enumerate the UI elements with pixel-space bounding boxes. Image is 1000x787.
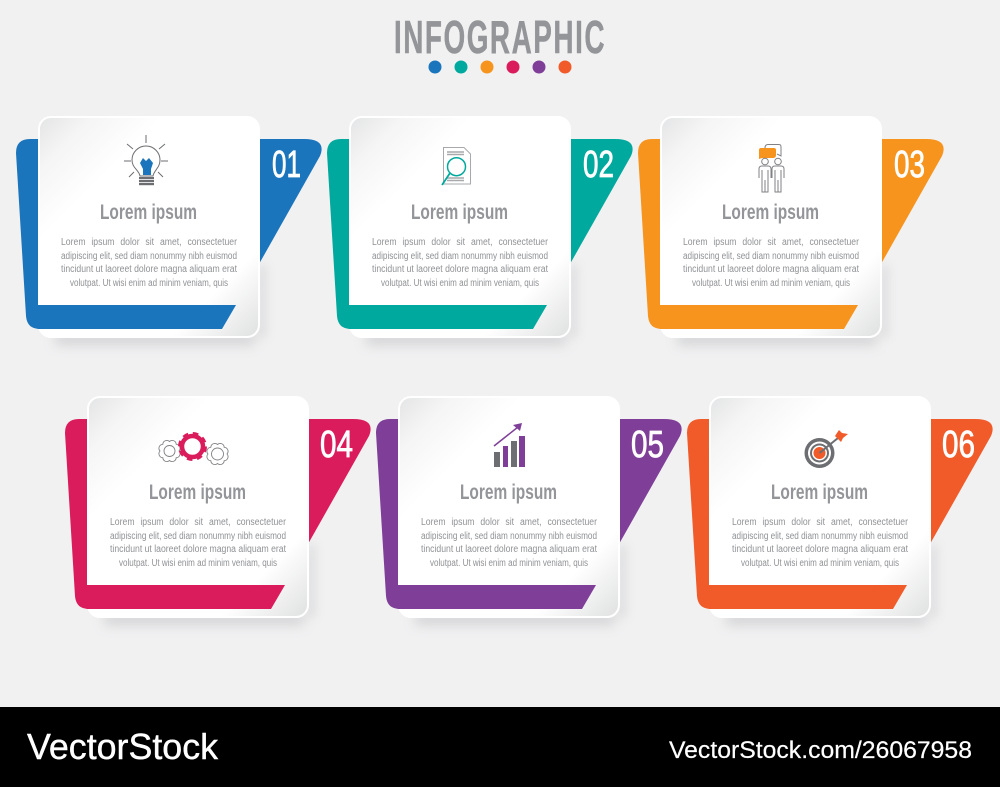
heading: Lorem ipsum — [149, 481, 246, 504]
text block: volutpat. Ut wisi enim ad minim veniam, quis — [430, 558, 588, 569]
title: INFOGRAPHIC — [394, 11, 606, 63]
panel: step 05 — [376, 397, 682, 625]
colour ribbon — [65, 419, 371, 609]
white card — [661, 117, 881, 337]
text block: Lorem ipsum dolor sit amet, consectetuer — [61, 237, 238, 248]
colour dots — [428, 60, 572, 74]
heading: Lorem ipsum — [100, 201, 197, 224]
text block: tincidunt ut laoreet dolore magna aliquam erat — [110, 544, 286, 555]
text block — [61, 237, 238, 289]
text block: adipiscing elit, sed diam nonummy nibh euismod — [683, 251, 859, 262]
white card — [710, 397, 930, 617]
text block: Lorem ipsum dolor sit amet, consectetuer — [110, 517, 287, 528]
white card — [399, 397, 619, 617]
colour ribbon — [687, 419, 993, 609]
icon: target with arrow — [804, 430, 848, 468]
icon: light bulb — [124, 135, 168, 185]
colour band — [349, 305, 547, 329]
number: 03 — [894, 144, 925, 186]
text block: adipiscing elit, sed diam nonummy nibh euismod — [61, 251, 237, 262]
footer bar — [0, 707, 1000, 787]
white card — [39, 117, 259, 337]
heading: Lorem ipsum — [460, 481, 557, 504]
number: 06 — [942, 424, 975, 466]
white card — [350, 117, 570, 337]
text block — [421, 517, 598, 569]
colour band — [38, 305, 236, 329]
text block: Lorem ipsum dolor sit amet, consectetuer — [683, 237, 860, 248]
colour ribbon — [376, 419, 682, 609]
text block — [110, 517, 287, 569]
text block: Lorem ipsum dolor sit amet, consectetuer — [372, 237, 549, 248]
icon: two people talking — [759, 144, 784, 192]
colour ribbon — [16, 139, 322, 329]
number: 01 — [272, 144, 301, 186]
colour ribbon — [327, 139, 633, 329]
text block: volutpat. Ut wisi enim ad minim veniam, quis — [381, 278, 539, 289]
white card — [88, 397, 308, 617]
panel: step 02 — [327, 117, 633, 345]
panel: step 01 — [16, 117, 322, 345]
heading: Lorem ipsum — [411, 201, 508, 224]
text block: tincidunt ut laoreet dolore magna aliquam erat — [61, 264, 237, 275]
text block — [732, 517, 909, 569]
number: 04 — [320, 424, 353, 466]
footer logo: VectorStock — [27, 726, 219, 767]
text block: tincidunt ut laoreet dolore magna aliquam erat — [683, 264, 859, 275]
colour band — [660, 305, 858, 329]
text block: Lorem ipsum dolor sit amet, consectetuer — [421, 517, 598, 528]
text block: adipiscing elit, sed diam nonummy nibh euismod — [372, 251, 548, 262]
icon: rising bar chart — [494, 423, 525, 467]
heading: Lorem ipsum — [722, 201, 819, 224]
text block: volutpat. Ut wisi enim ad minim veniam, quis — [70, 278, 228, 289]
text block: volutpat. Ut wisi enim ad minim veniam, quis — [741, 558, 899, 569]
text block: adipiscing elit, sed diam nonummy nibh euismod — [421, 531, 597, 542]
heading: Lorem ipsum — [771, 481, 868, 504]
icon: gears — [159, 434, 228, 465]
colour ribbon — [638, 139, 944, 329]
text block — [372, 237, 549, 289]
icon: document search — [442, 148, 470, 185]
panel: step 06 — [687, 397, 993, 625]
text block: adipiscing elit, sed diam nonummy nibh euismod — [110, 531, 286, 542]
text block: tincidunt ut laoreet dolore magna aliquam erat — [421, 544, 597, 555]
text block: tincidunt ut laoreet dolore magna aliquam erat — [732, 544, 908, 555]
colour band — [398, 585, 596, 609]
colour band — [709, 585, 907, 609]
number: 05 — [631, 424, 664, 466]
text block: adipiscing elit, sed diam nonummy nibh euismod — [732, 531, 908, 542]
panel: step 03 — [638, 117, 944, 345]
panel: step 04 — [65, 397, 371, 625]
text block: Lorem ipsum dolor sit amet, consectetuer — [732, 517, 909, 528]
text block: volutpat. Ut wisi enim ad minim veniam, quis — [119, 558, 277, 569]
text block — [683, 237, 860, 289]
number: 02 — [583, 144, 614, 186]
text block: volutpat. Ut wisi enim ad minim veniam, quis — [692, 278, 850, 289]
text block: tincidunt ut laoreet dolore magna aliquam erat — [372, 264, 548, 275]
footer url: VectorStock.com/26067958 — [669, 737, 972, 764]
colour band — [87, 585, 285, 609]
